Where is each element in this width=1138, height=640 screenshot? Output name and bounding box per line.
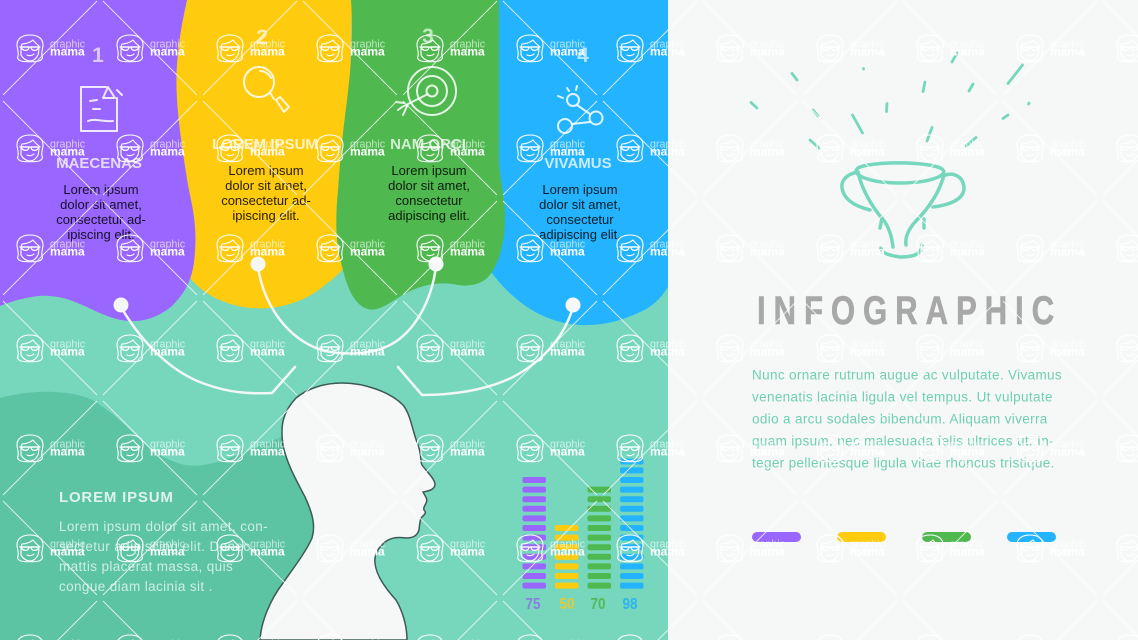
text: nam orci body: dolor sit amet,: [388, 178, 470, 193]
bar: green 70: [588, 487, 611, 589]
text: vivamus body: consectetur: [546, 212, 614, 227]
body: lower-left: sectetur adipiscing elit. Donec: [59, 539, 250, 554]
panel: green blob: [336, 0, 505, 310]
text: maecenas body: ipiscing elit.: [67, 227, 135, 242]
text block: right description: quam ipsum, nec malesuada felis ultrices ut. In-: [752, 434, 1054, 448]
bar: blue 98: [620, 458, 644, 589]
panel: purple blob: [0, 0, 195, 321]
column 4: vivamus: [539, 44, 621, 242]
heading: maecenas: MAECENAS: [56, 155, 142, 172]
number 4: 4: [577, 44, 589, 67]
head silhouette: [260, 383, 435, 640]
heading: nam orci: NAM ORCI: [390, 136, 466, 153]
text: vivamus body: adipiscing elit.: [539, 227, 621, 242]
title: INFOGRAPHIC: [757, 288, 1062, 333]
body: lower-left: Lorem ipsum dolor sit amet, con-: [59, 519, 268, 534]
text: maecenas body: dolor sit amet,: [60, 197, 142, 212]
right panel background: [668, 0, 1138, 640]
text: lorem ipsum body: [221, 163, 311, 223]
text block: right description: venenatis lacinia ligula vel tempus. Ut vulputate: [752, 390, 1053, 404]
bar value labels: 75: [526, 596, 541, 613]
text: vivamus body: Lorem ipsum: [542, 182, 618, 197]
text: lorem ipsum body: dolor sit amet,: [225, 178, 307, 193]
body: lower-left: mattis placerat massa, quis: [59, 559, 233, 574]
legend pills: [752, 532, 1056, 542]
text block: lower-left description: [59, 489, 268, 594]
icon: document: [81, 87, 122, 131]
body: lower-left: congue diam lacinia sit .: [59, 579, 213, 594]
text: nam orci body: [388, 163, 470, 223]
text block: right description: [752, 368, 1062, 470]
body: lower-left: [59, 519, 268, 594]
icon: magnifier: [244, 67, 289, 112]
text: maecenas body: consectetur ad-: [56, 212, 146, 227]
bar value labels: 70: [590, 596, 606, 613]
text: lorem ipsum body: ipiscing elit.: [232, 208, 300, 223]
icon: target: [396, 67, 456, 115]
left panel background: [0, 0, 668, 640]
text block: right description: teger pellentesque ligula vitae rhoncus tristique.: [752, 456, 1055, 470]
panel: blue blob: [485, 0, 668, 325]
text: maecenas body: [56, 182, 146, 242]
connector: blue to head: [398, 298, 580, 395]
column 1: maecenas: [56, 44, 146, 242]
number 2: 2: [256, 26, 268, 49]
bar: purple 75: [522, 477, 546, 589]
panel: yellow blob: [176, 0, 352, 308]
column 3: nam orci: [388, 25, 470, 223]
text: maecenas body: Lorem ipsum: [63, 182, 139, 197]
sparks: [751, 53, 1029, 148]
text block: right description: Nunc ornare rutrum augue ac vulputate. Vivamus: [752, 368, 1062, 382]
trophy cup: [842, 163, 964, 257]
connector: purple to head: [114, 298, 295, 393]
icon: share nodes: [558, 86, 602, 133]
lower-left darker teal shape: [0, 392, 330, 640]
icon: trophy with sparks: [751, 53, 1029, 257]
text: nam orci body: consectetur: [395, 193, 463, 208]
number 1: 1: [92, 44, 104, 67]
bar value labels: 98: [622, 596, 638, 613]
text: vivamus body: [539, 182, 621, 242]
text: lorem ipsum body: Lorem ipsum: [228, 163, 304, 178]
text: nam orci body: adipiscing elit.: [388, 208, 470, 223]
bar chart: [522, 458, 644, 613]
bar value labels: 50: [560, 596, 574, 613]
bar value labels: [526, 596, 638, 613]
heading: lower-left: LOREM IPSUM: [59, 489, 174, 506]
bar: yellow 50: [555, 525, 578, 589]
text: nam orci body: Lorem ipsum: [391, 163, 467, 178]
text block: right description: odio a arcu sodales bibendum. Aliquam viverra: [752, 412, 1048, 426]
column 2: lorem ipsum: [212, 26, 318, 223]
text: vivamus body: dolor sit amet,: [539, 197, 621, 212]
heading: vivamus: VIVAMUS: [544, 155, 612, 172]
heading: lorem ipsum: LOREM IPSUM: [212, 136, 318, 153]
text: lorem ipsum body: consectetur ad-: [221, 193, 311, 208]
connector: yellow and green arc: [250, 256, 444, 353]
number 3: 3: [422, 25, 434, 48]
